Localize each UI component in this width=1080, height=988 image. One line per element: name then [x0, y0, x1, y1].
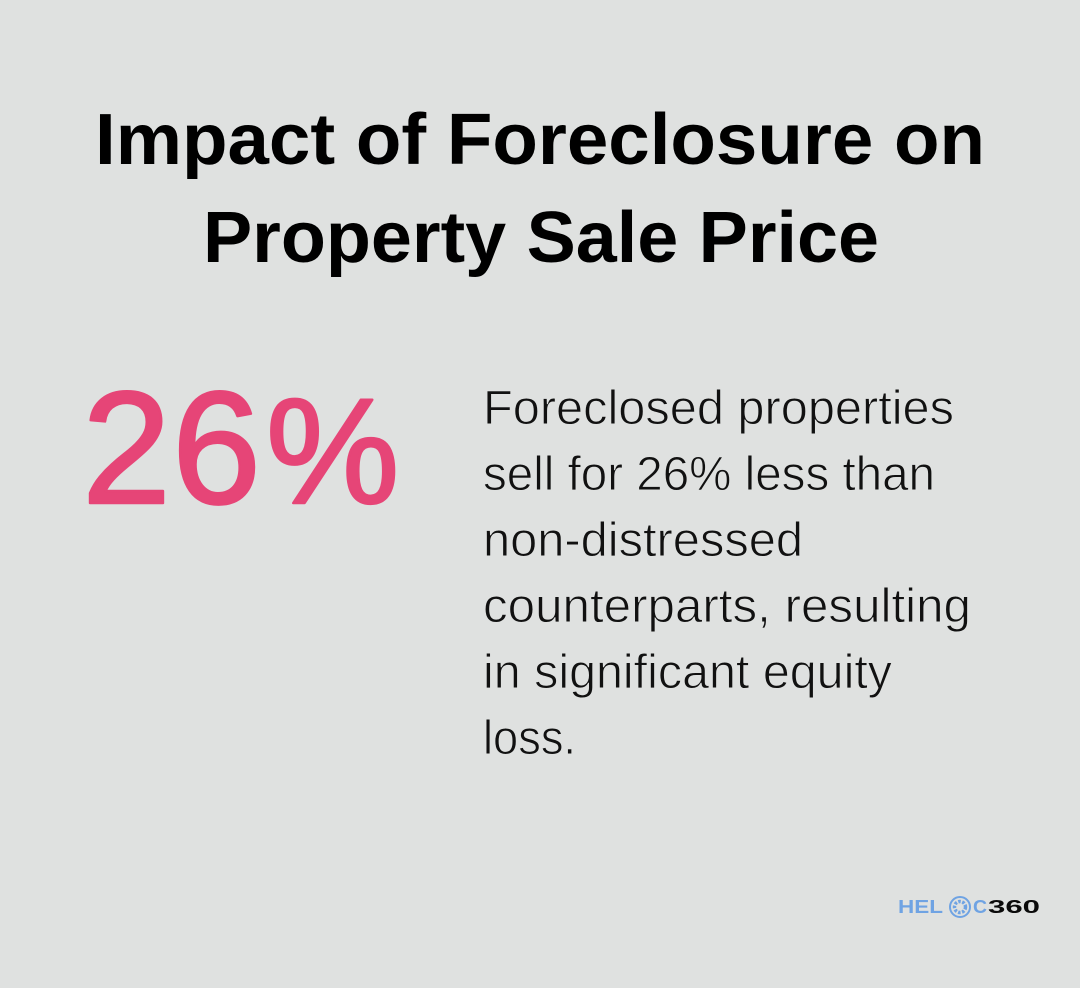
logo icon: swirl O: [950, 897, 970, 917]
description text: loss.: [483, 712, 576, 765]
logo text: HEL: HEL: [898, 897, 943, 917]
big statistic: 26%: 26: [82, 358, 261, 537]
description text: sell for 26% less than: [483, 448, 935, 501]
logo text: C: C: [973, 897, 987, 917]
title: Property Sale Price: [203, 198, 879, 278]
description text: Foreclosed properties: [483, 382, 954, 435]
title: [95, 100, 985, 278]
description text: [483, 382, 971, 765]
description text: counterparts, resulting: [483, 580, 971, 633]
logo: HELOC360: [898, 897, 1040, 917]
logo text: 360: 360: [988, 897, 1040, 917]
big statistic: 26%: %: [266, 367, 399, 535]
title: Impact of Foreclosure on: [95, 100, 985, 180]
description text: in significant equity: [483, 646, 892, 699]
description text: non-distressed: [483, 514, 803, 567]
